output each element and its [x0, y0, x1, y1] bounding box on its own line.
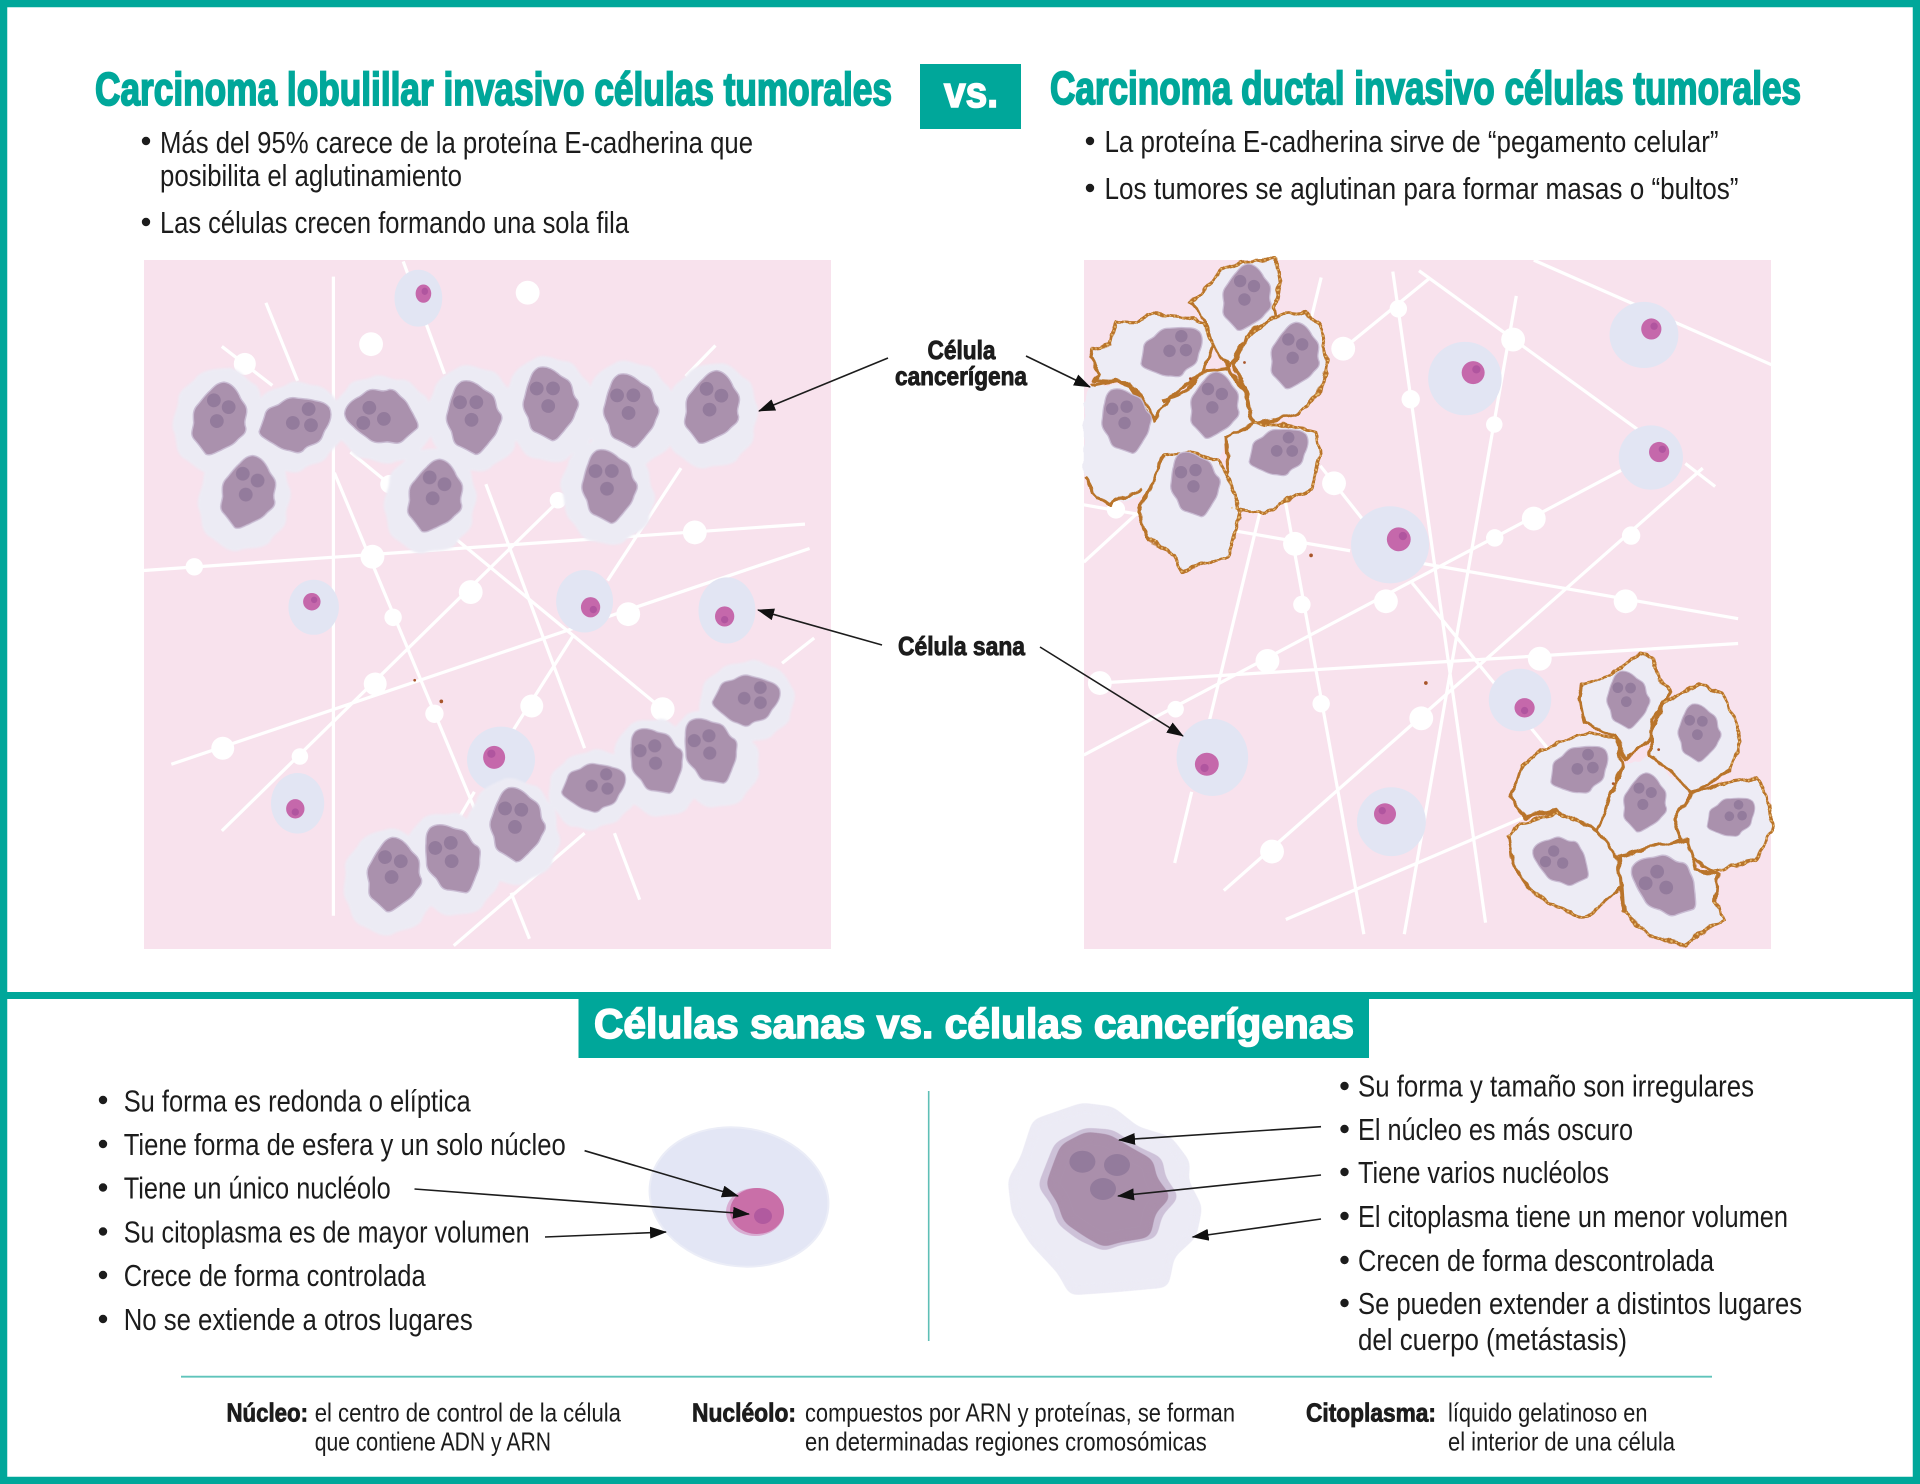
- list: cancer cell traits: El núcleo es más oscuro: [1358, 1112, 1633, 1147]
- definition: cytoplasm: líquido gelatinoso en: [1448, 1398, 1648, 1428]
- definition: nucleolus: compuestos por ARN y proteínas, se forman: [805, 1398, 1235, 1428]
- list: healthy cell traits: No se extiende a otros lugares: [124, 1302, 473, 1337]
- section divider band: [0, 992, 1920, 999]
- cancer cells, lower row: [339, 654, 802, 940]
- label: cancer cell: Célula: [928, 335, 996, 365]
- arrow: healthy cell to left panel: [758, 610, 882, 645]
- section heading banner: Células sanas vs. células cancerígenas: [594, 1000, 1354, 1047]
- bullet list: ductal: Los tumores se aglutinan para formar masas o “bultos”: [1104, 171, 1738, 206]
- title: lobular carcinoma: Carcinoma lobulillar invasivo células tumorales: [95, 63, 892, 115]
- definition: cytoplasm: el interior de una célula: [1448, 1427, 1675, 1457]
- vs. badge: [920, 64, 1021, 129]
- list: cancer cell traits: Crecen de forma descontrolada: [1358, 1243, 1715, 1278]
- definition: nucleolus: [692, 1398, 1235, 1457]
- arrow: nucleus of healthy cell: [585, 1151, 738, 1196]
- arrow: cancer cell to left panel: [759, 358, 888, 411]
- list: healthy cell traits: Su citoplasma es de mayor volumen: [124, 1215, 530, 1250]
- healthy cells: [271, 270, 755, 834]
- bullet list: ductal: [1086, 124, 1738, 206]
- definition: cytoplasm: Citoplasma:: [1306, 1398, 1436, 1428]
- bullet list: lobular: posibilita el aglutinamiento: [160, 158, 462, 193]
- upper cancer cluster: [1084, 260, 1327, 571]
- arrow: cytoplasm of healthy cell: [545, 1232, 666, 1237]
- fibres and nodes: [144, 261, 814, 946]
- list: cancer cell traits: El citoplasma tiene un menor volumen: [1358, 1199, 1788, 1234]
- list: healthy cell traits: Su forma es redonda o elíptica: [124, 1084, 471, 1119]
- list: cancer cell traits: [1340, 1069, 1802, 1357]
- list: cancer cell traits: Su forma y tamaño son irregulares: [1358, 1069, 1754, 1104]
- illustration: healthy cell: [638, 1113, 840, 1281]
- list: cancer cell traits: Tiene varios nucléolos: [1358, 1155, 1609, 1190]
- bullet list: lobular: Más del 95% carece de la proteína E-cadherina que: [160, 125, 753, 160]
- definition: nucleolus: en determinadas regiones cromosómicas: [805, 1427, 1207, 1457]
- list: cancer cell traits: del cuerpo (metástasis): [1358, 1322, 1627, 1357]
- bullet list: lobular: [142, 125, 753, 240]
- fibres and nodes: [1084, 260, 1772, 934]
- definition: cytoplasm: [1306, 1398, 1675, 1457]
- arrow: nucleoli of cancer cell: [1118, 1175, 1321, 1196]
- arrow: nucleus of cancer cell: [1119, 1127, 1321, 1140]
- healthy cells: [1177, 302, 1683, 856]
- arrow: cytoplasm of cancer cell: [1193, 1219, 1321, 1237]
- panel: ductal carcinoma tissue: [1084, 260, 1773, 949]
- panel: lobular carcinoma tissue: [144, 260, 831, 949]
- bullet list: lobular: Las células crecen formando una sola fila: [160, 205, 630, 240]
- vs. badge: vs.: [944, 68, 998, 117]
- label: cancer cell: cancerígena: [895, 361, 1027, 391]
- vertical divider: [928, 1091, 930, 1341]
- list: cancer cell traits: Se pueden extender a distintos lugares: [1358, 1286, 1802, 1321]
- arrow: nucleolus of healthy cell: [414, 1189, 749, 1214]
- definition: nucleolus: Nucléolo:: [692, 1398, 796, 1428]
- arrow: healthy cell to right panel: [1040, 647, 1183, 736]
- definition: nucleus: que contiene ADN y ARN: [315, 1427, 551, 1457]
- definition: nucleus: el centro de control de la célula: [315, 1398, 621, 1428]
- definition: nucleus: [226, 1398, 621, 1457]
- label: cancer cell: [895, 335, 1027, 391]
- illustration: cancer cell: [1008, 1103, 1202, 1295]
- label: healthy cell: Célula sana: [898, 631, 1025, 661]
- list: healthy cell traits: Crece de forma controlada: [124, 1258, 426, 1293]
- cancer cells, upper row: [161, 348, 770, 565]
- arrow: cancer cell to right panel: [1026, 356, 1090, 387]
- horizontal divider: [181, 1376, 1712, 1378]
- list: healthy cell traits: [99, 1084, 566, 1337]
- list: healthy cell traits: Tiene un único nucléolo: [124, 1171, 391, 1206]
- definition: nucleus: Núcleo:: [226, 1398, 308, 1428]
- lower cancer cluster: [1509, 654, 1773, 946]
- list: healthy cell traits: Tiene forma de esfera y un solo núcleo: [124, 1127, 566, 1162]
- bullet list: ductal: La proteína E-cadherina sirve de “pegamento celular”: [1104, 124, 1718, 159]
